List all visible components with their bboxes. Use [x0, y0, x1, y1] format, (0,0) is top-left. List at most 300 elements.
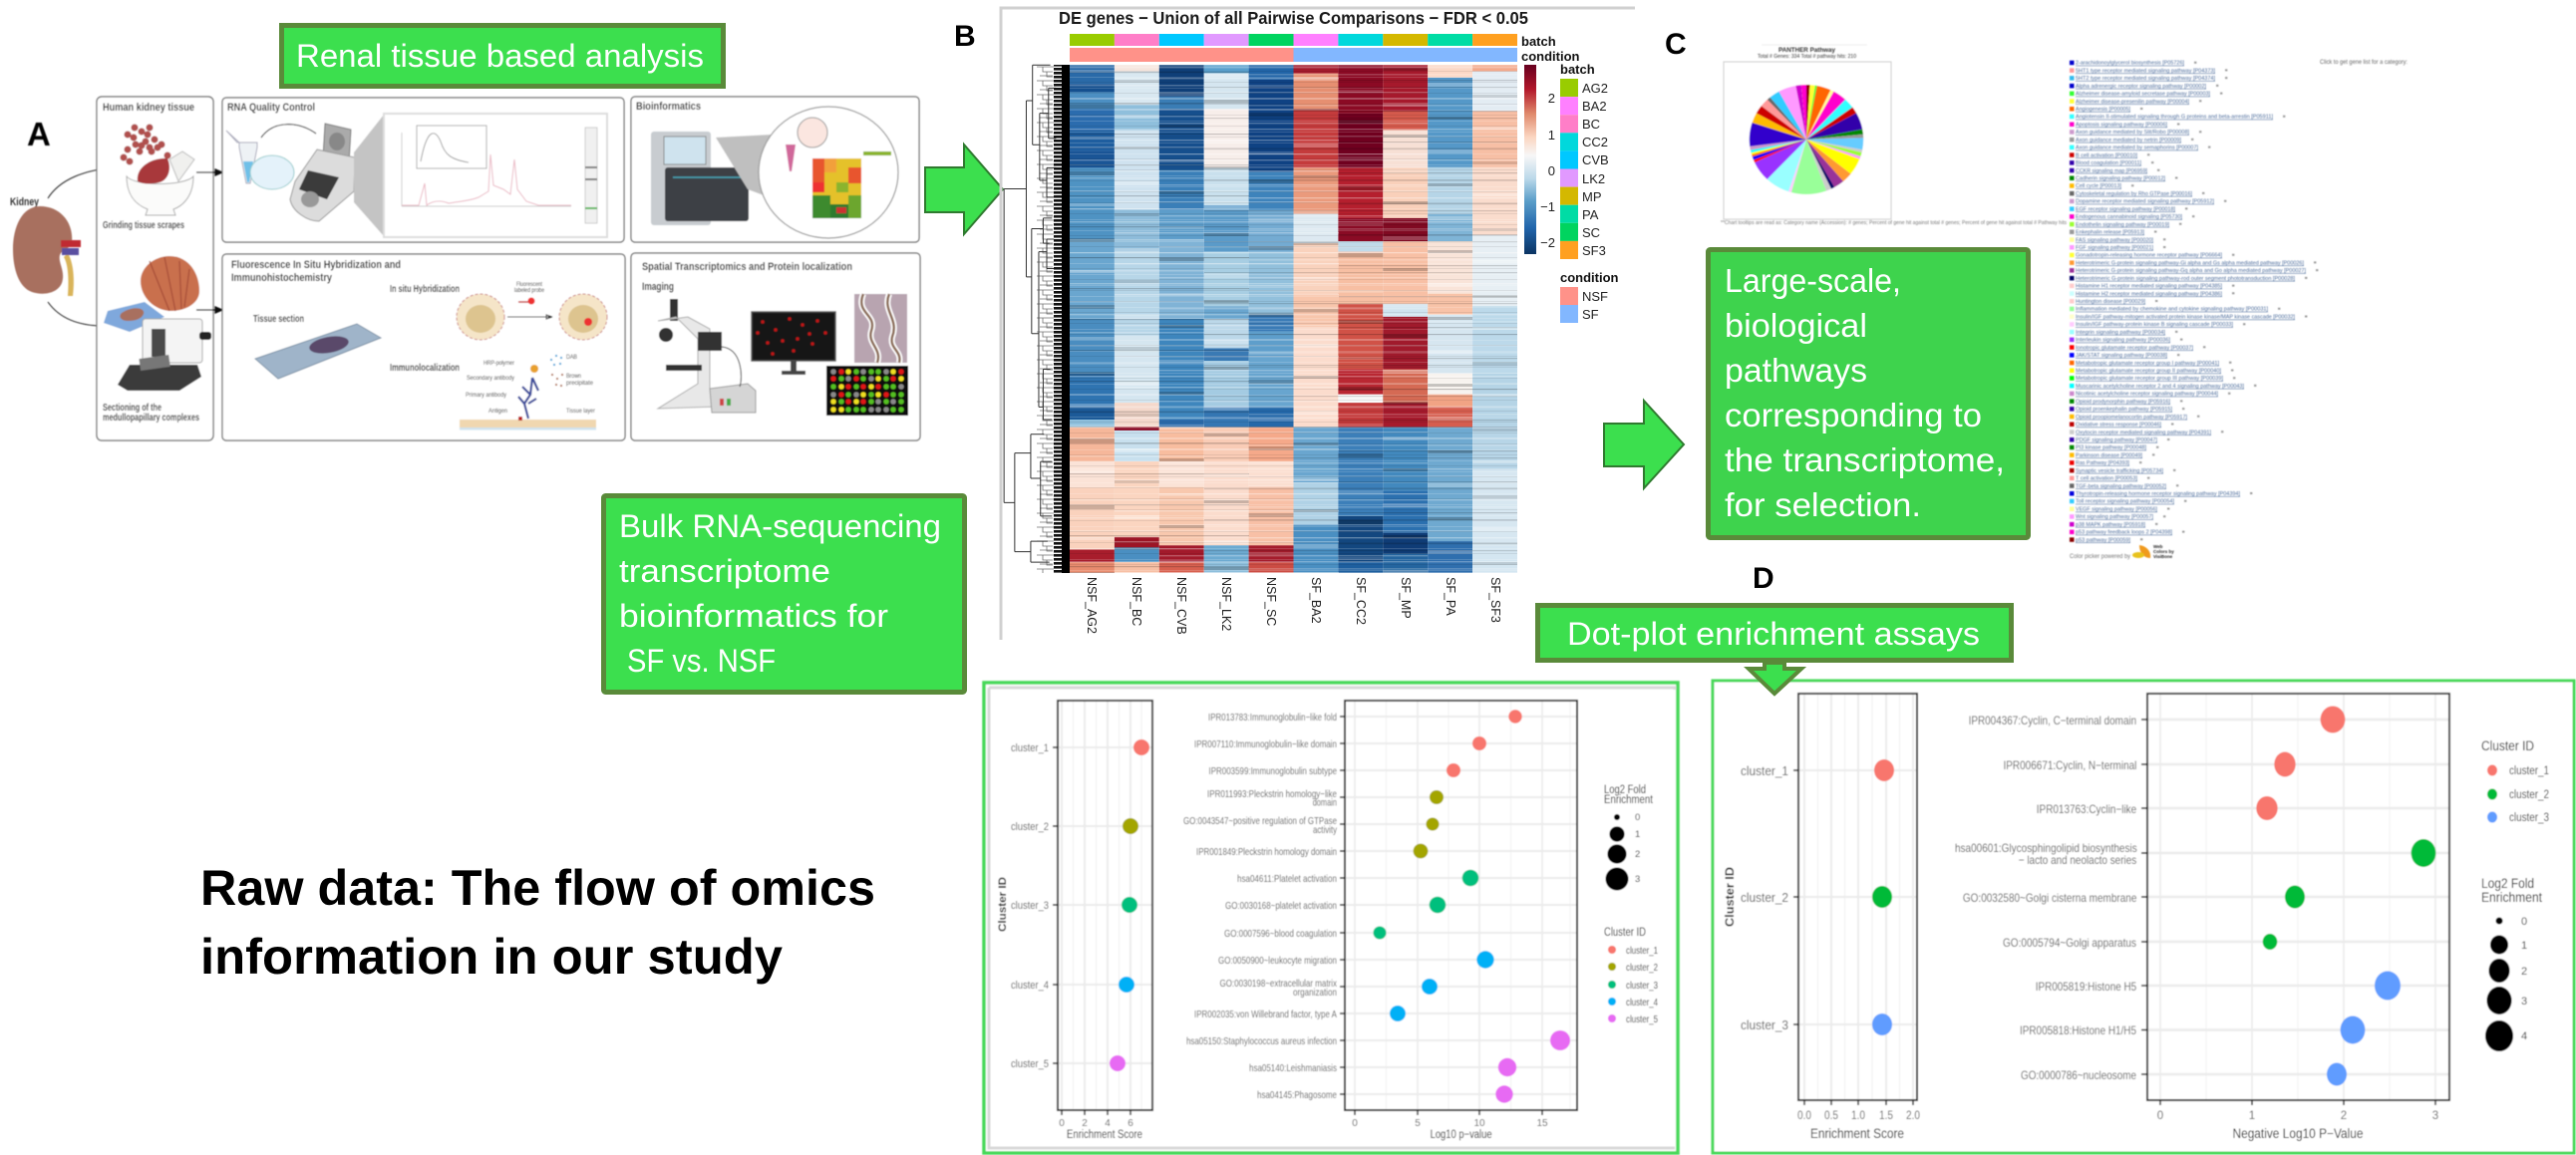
legend: fold enrichment: Log2 Fold — [2481, 876, 2534, 891]
pathway names — [2076, 61, 2306, 543]
colour scale: 2 — [1548, 91, 1555, 106]
legend: batch: MP — [1582, 189, 1601, 204]
ticks — [1053, 747, 1130, 1115]
term labels: IPR002035:von Willebrand factor, type A — [1194, 1009, 1337, 1020]
dots — [1133, 739, 1149, 755]
dots — [1874, 759, 1894, 781]
callout: large-scale pathways — [1709, 249, 2028, 538]
pathway names: Integrin signaling pathway [P00034] — [2076, 330, 2165, 336]
icon: magnifier — [250, 155, 294, 189]
icon: mortar and pestle — [127, 151, 194, 215]
legend: fold enrichment: 2 — [2521, 966, 2527, 978]
panel border — [1713, 681, 2574, 1153]
term labels: IPR006671:Cyclin, N−terminal — [2004, 758, 2136, 772]
callout: dot-plot enrichment assays — [1537, 606, 2012, 660]
legend: cluster ID: cluster_3 — [2509, 812, 2549, 824]
pathway names: PDGF signaling pathway [P00047] — [2076, 437, 2157, 443]
icon: tube — [226, 131, 257, 183]
legend: cluster ID: cluster_1 — [1626, 946, 1658, 957]
small circle — [798, 118, 827, 147]
icon: slide — [255, 324, 381, 379]
term labels: GO:0030168~platelet activation — [1225, 900, 1337, 912]
zoom wedge — [354, 115, 384, 236]
term labels: hsa05140:Leishmaniasis — [1249, 1062, 1337, 1074]
pathway names: p53 pathway [P00059] — [2076, 537, 2130, 543]
icon: kidney — [13, 206, 81, 296]
curved arrow — [261, 125, 316, 138]
term labels: hsa04611:Platelet activation — [1237, 873, 1337, 885]
legend: fold enrichment — [1604, 784, 1654, 891]
callout: large-scale pathways: corresponding to — [1725, 397, 1982, 433]
x title: Enrichment Score — [1067, 1129, 1142, 1141]
panel: human kidney tissue — [97, 97, 213, 440]
label A: A — [27, 116, 51, 152]
legend: batch: CC2 — [1582, 135, 1608, 149]
x title: Log10 p−value — [1431, 1129, 1492, 1141]
legend: condition: SF — [1582, 307, 1599, 322]
pathway names: Alpha adrenergic receptor signaling pathway [P00002] — [2076, 84, 2206, 90]
pathway names: Heterotrimeric G-protein signaling pathway-Gi alpha and Gs alpha mediated pathway [P00026] — [2076, 260, 2304, 266]
arrow: to heatmap — [925, 144, 1003, 234]
panel: bioinformatics — [631, 97, 919, 242]
y labels: cluster_1 — [1011, 742, 1049, 754]
legend: cluster ID: cluster_2 — [2509, 789, 2549, 801]
pathway names: Toll receptor signaling pathway [P00054] — [2076, 499, 2174, 505]
term labels: organization — [1293, 987, 1337, 999]
callout: dot-plot enrichment assays: Dot-plot enrichment assays — [1567, 616, 1980, 652]
icon: antibodies — [518, 378, 538, 419]
pathway names: EGF receptor signaling pathway [P00018] — [2076, 206, 2175, 212]
pathway names: TGF-beta signaling pathway [P00052] — [2076, 483, 2166, 489]
heading: RNA Quality Control — [227, 102, 315, 114]
logo text: Colors by — [2153, 549, 2174, 554]
sample labels: SF_SF3 — [1488, 577, 1502, 623]
pathway names: Oxidative stress response [P00046] — [2076, 423, 2161, 429]
term labels: GO:0030198~extracellular matrix — [1220, 978, 1338, 990]
term labels — [1183, 712, 1338, 1101]
pathway names: Metabotropic glutamate receptor group III pathway [P00039] — [2076, 376, 2223, 382]
logo text — [2153, 544, 2174, 559]
electropherogram panel — [384, 114, 607, 237]
x labels — [1059, 1118, 1133, 1129]
x labels: 2 — [1082, 1118, 1088, 1129]
icon: cell — [457, 294, 504, 340]
callout: large-scale pathways: for selection. — [1725, 486, 1921, 523]
term labels: GO:0000786~nucleosome — [2021, 1068, 2136, 1082]
pathway names: Metabotropic glutamate receptor group II pathway [P00040] — [2076, 369, 2221, 375]
term labels: − lacto and neolacto series — [2019, 853, 2136, 867]
pathway names: Nicotinic acetylcholine receptor signaling pathway [P00044] — [2076, 392, 2218, 398]
pathway names: Alzheimer disease-amyloid secretase pathway [P00003] — [2076, 92, 2210, 98]
x labels: 5 — [1415, 1118, 1421, 1129]
sample labels: SF_MP — [1399, 577, 1413, 619]
subheading: Imaging — [642, 281, 674, 293]
legend: condition: condition — [1560, 270, 1619, 285]
arrow: kidney to sectioning — [48, 302, 104, 326]
antibody labels — [466, 354, 596, 415]
slide layer — [460, 428, 596, 431]
pathway names: Angiogenesis [P00005] — [2076, 107, 2130, 113]
antibody labels: Primary antibody — [466, 392, 507, 399]
y labels: cluster_4 — [1011, 980, 1049, 992]
panel: spatial transcriptomics — [631, 253, 920, 440]
pathway names: B cell activation [P00010] — [2076, 152, 2137, 158]
logo text: VisiBone — [2153, 554, 2173, 559]
term labels: IPR013763:Cyclin−like — [2037, 802, 2136, 816]
callout: bulk RNA sequencing: Bulk RNA-sequencing — [619, 508, 941, 544]
dots — [1508, 710, 1522, 723]
pathway names: Endothelin signaling pathway [P00019] — [2076, 222, 2169, 228]
pathway names: Muscarinic acetylcholine receptor 2 and 4 signaling pathway [P00043] — [2076, 384, 2244, 390]
subheading: In situ Hybridization — [390, 284, 460, 295]
callout: renal tissue based analysis — [281, 26, 724, 86]
legend: fold enrichment: Enrichment — [2481, 890, 2542, 905]
x labels: 15 — [1536, 1118, 1548, 1129]
icon: cell with probe — [559, 294, 607, 340]
colour scale: 1 — [1548, 128, 1555, 143]
callout: large-scale pathways: Large-scale, — [1725, 262, 1901, 299]
icon: DAB dots — [551, 356, 561, 365]
dots — [2321, 706, 2345, 733]
legend: batch: AG2 — [1582, 81, 1608, 96]
pie chart block: Total # Genes: 334 Total # pathway hits: 210 — [1758, 54, 1856, 60]
x labels: 2 — [2341, 1110, 2347, 1122]
term labels: IPR013783:Immunoglobulin−like fold — [1208, 712, 1337, 723]
swatches — [2070, 61, 2074, 542]
arrow: section to FISH — [196, 307, 222, 313]
heading line 2: Immunohistochemistry — [231, 272, 333, 284]
pathway names: Synaptic vesicle trafficking [P05734] — [2076, 468, 2163, 474]
pathway names: Blood coagulation [P00011] — [2076, 160, 2141, 166]
subheading: Tissue section — [253, 314, 304, 325]
legend: fold enrichment: 0 — [1635, 812, 1640, 823]
click note: Click to get gene list for a category: — [2320, 60, 2408, 66]
pathway names: Axon guidance mediated by netrin [P00009] — [2076, 138, 2181, 144]
icon: cable — [722, 347, 741, 387]
term labels: GO:0043547~positive regulation of GTPase — [1183, 815, 1337, 827]
legend: batch: CVB — [1582, 152, 1609, 167]
caption: Grinding tissue scrapes — [103, 220, 184, 231]
pathway names: Alzheimer disease-presenilin pathway [P00004] — [2076, 99, 2189, 105]
pathway names: Angiotensin II-stimulated signaling through G proteins and beta-arrestin [P05911] — [2076, 115, 2273, 121]
antibody labels: Tissue layer — [566, 408, 596, 415]
panel: RNA quality control — [222, 98, 624, 242]
icon: microarray — [826, 366, 908, 416]
x title: Negative Log10 P−Value — [2233, 1126, 2363, 1141]
callout: bulk RNA sequencing: transcriptome — [619, 553, 830, 589]
arrow head — [98, 323, 106, 329]
legend: condition: NSF — [1582, 289, 1608, 304]
pathway names: Dopamine receptor mediated signaling pathway [P05912] — [2076, 199, 2214, 205]
icon: nucleus with signal — [568, 305, 598, 333]
pathway names: CCKR signaling map [P06959] — [2076, 168, 2147, 174]
pathway names: Cell cycle [P00013] — [2076, 183, 2121, 189]
caption: Sectioning of the — [103, 403, 161, 414]
y labels: cluster_5 — [1011, 1058, 1049, 1070]
term labels: GO:0050900~leukocyte migration — [1218, 955, 1337, 967]
panel A: renal tissue workflow — [10, 97, 920, 440]
pathway names: Metabotropic glutamate receptor group I pathway [P00041] — [2076, 361, 2219, 367]
icon: small tube — [786, 144, 796, 171]
subheading: Immunolocalization — [390, 363, 460, 374]
callout: renal tissue based analysis: Renal tissue based analysis — [296, 38, 704, 74]
panel: FISH and IHC — [222, 254, 625, 440]
panel D1: five-cluster dot plot — [984, 683, 1678, 1153]
legend: fold enrichment: 3 — [2521, 996, 2527, 1008]
term labels: hsa05150:Staphylococcus aureus infection — [1186, 1035, 1337, 1047]
arrow: kidney to tissue — [48, 167, 118, 198]
legend: fold enrichment: 4 — [2521, 1030, 2527, 1042]
pathway names: 2-arachidonoylglycerol biosynthesis [P05726] — [2076, 61, 2184, 67]
pathway names: Thyrotropin-releasing hormone receptor signaling pathway [P04394] — [2076, 491, 2240, 497]
pathway names: PI3 kinase pathway [P00048] — [2076, 445, 2146, 451]
ticks — [2141, 720, 2435, 1105]
label C: C — [1665, 28, 1687, 61]
x labels: 0 — [2157, 1110, 2163, 1122]
sample labels: NSF_CVB — [1174, 577, 1188, 635]
small heatmap — [812, 158, 861, 218]
pathway names: Oxytocin receptor mediated signaling pathway [P04391] — [2076, 430, 2211, 435]
pathway names: FGF signaling pathway [P00021] — [2076, 245, 2153, 251]
logo text: Web — [2153, 544, 2163, 549]
legend: cluster ID: Cluster ID — [2481, 738, 2534, 753]
legend: batch: SF3 — [1582, 243, 1606, 258]
colour scale — [1524, 65, 1555, 254]
y labels: cluster_1 — [1741, 764, 1788, 778]
legend: batch: LK2 — [1582, 171, 1605, 186]
term labels: domain — [1313, 797, 1337, 809]
x labels: 0.5 — [1824, 1110, 1838, 1122]
sample labels — [1085, 577, 1502, 635]
term labels: IPR003599:Immunoglobulin subtype — [1208, 765, 1337, 777]
dendrogram — [1004, 65, 1070, 573]
term labels: IPR004367:Cyclin, C−terminal domain — [1969, 714, 2136, 727]
legend: cluster ID — [2481, 738, 2549, 824]
probe label: Fluorescent — [516, 282, 542, 288]
x labels — [2157, 1110, 2438, 1122]
term labels: IPR005819:Histone H5 — [2036, 980, 2136, 994]
heading: raw data — [200, 860, 875, 985]
sample labels: NSF_BC — [1129, 577, 1143, 626]
legend: fold enrichment: Log2 Fold — [1604, 784, 1646, 796]
legend: cluster ID: Cluster ID — [1604, 927, 1646, 939]
legend: batch: SC — [1582, 225, 1600, 240]
heading: Bioinformatics — [636, 101, 701, 113]
legend: batch: batch — [1560, 62, 1595, 77]
term labels: IPR005818:Histone H1/H5 — [2020, 1023, 2136, 1037]
panel B: heatmap — [954, 8, 1635, 640]
y title: Cluster ID — [997, 877, 1009, 932]
pathway names: Endogenous cannabinoid signaling [P05730] — [2076, 214, 2182, 220]
heatmap title: DE genes − Union of all Pairwise Comparisons − FDR < 0.05 — [1059, 8, 1528, 28]
callout: bulk RNA sequencing: bioinformatics for — [619, 598, 888, 634]
icon: probe — [518, 297, 534, 305]
term labels: hsa00601:Glycosphingolipid biosynthesis — [1955, 841, 2137, 855]
colour legend — [863, 151, 891, 155]
sample labels: NSF_LK2 — [1219, 577, 1233, 631]
condition annotation bar — [1070, 48, 1517, 62]
pathway names: JAK/STAT signaling pathway [P00038] — [2076, 353, 2167, 359]
term labels — [1955, 714, 2137, 1082]
pathway names: Gonadotropin-releasing hormone receptor pathway [P06664] — [2076, 253, 2222, 259]
pathway names: Opioid proopiomelanocortin pathway [P05917] — [2076, 415, 2187, 421]
chart: log10 p-value — [1183, 701, 1577, 1141]
icon: visibone logo — [2132, 545, 2150, 558]
colour picker note: Color picker powered by — [2070, 554, 2130, 560]
icon: tissue image — [854, 294, 907, 363]
icon: tissue on slide — [308, 334, 350, 356]
pathway names: Opioid proenkephalin pathway [P05915] — [2076, 407, 2172, 413]
legend: cluster ID — [1604, 927, 1658, 1025]
icon: HRP — [530, 365, 538, 373]
pathway names: VEGF signaling pathway [P00056] — [2076, 506, 2157, 512]
antigen — [518, 417, 522, 421]
sample labels: NSF_SC — [1264, 577, 1278, 626]
x labels: 2.0 — [1906, 1110, 1920, 1122]
ticks — [1793, 770, 1913, 1105]
kidney label: Kidney — [10, 196, 40, 208]
pathway names: Interleukin signaling pathway [P00036] — [2076, 338, 2170, 344]
chart: enrichment score — [997, 701, 1152, 1141]
heading: Spatial Transcriptomics and Protein localization — [642, 261, 852, 273]
annotation label condition: condition — [1521, 49, 1580, 64]
callout: large-scale pathways: pathways — [1725, 352, 1867, 389]
x labels: 0 — [1352, 1118, 1358, 1129]
heading: Human kidney tissue — [103, 102, 194, 114]
term labels: hsa04145:Phagosome — [1257, 1089, 1337, 1101]
term labels: GO:0007596~blood coagulation — [1224, 928, 1337, 940]
term labels: GO:0032580~Golgi cisterna membrane — [1963, 891, 2137, 905]
pathway names: Axon guidance mediated by Slit/Robo [P00008] — [2076, 130, 2189, 136]
legend: cluster ID: cluster_1 — [2509, 765, 2549, 777]
antibody labels: DAB — [566, 354, 577, 361]
term labels: IPR001849:Pleckstrin homology domain — [1196, 846, 1337, 858]
pathway names: 5HT2 type receptor mediated signaling pathway [P04374] — [2076, 76, 2215, 82]
x labels: 4 — [1105, 1118, 1111, 1129]
legend: fold enrichment: 1 — [2521, 940, 2527, 952]
icon: tissue fragments — [124, 128, 167, 161]
antibody labels: Secondary antibody — [467, 375, 515, 382]
legend: fold enrichment: 1 — [1635, 829, 1640, 840]
sample labels: NSF_AG2 — [1085, 577, 1099, 634]
tissue layer — [460, 420, 596, 428]
x labels: 1 — [2249, 1110, 2255, 1122]
legend: batch: PA — [1582, 207, 1599, 222]
heading line 1: Fluorescence In Situ Hybridization and — [231, 259, 401, 271]
caption: medullopapillary complexes — [103, 413, 199, 424]
label D: D — [1753, 562, 1774, 595]
icon: sequencer — [651, 132, 749, 225]
antibody labels: HRP-polymer — [483, 360, 515, 367]
pie chart block: PANTHER Pathway — [1778, 47, 1835, 54]
pie — [1777, 112, 1835, 167]
ticks — [1340, 717, 1542, 1115]
pathway names: Histamine H1 receptor mediated signaling pathway [P04385] — [2076, 284, 2222, 290]
icon: precipitate dots — [552, 375, 562, 386]
pathway names: Histamine H2 receptor mediated signaling pathway [P04386] — [2076, 291, 2222, 297]
pathway names: Apoptosis signaling pathway [P00006] — [2076, 122, 2167, 128]
label B: B — [954, 20, 976, 53]
x title: Enrichment Score — [1810, 1126, 1904, 1141]
arrow: tissue to RNA QC — [196, 169, 222, 175]
arrow: to pathway panel — [1604, 401, 1684, 488]
legend: cluster ID: cluster_4 — [1626, 998, 1658, 1009]
legend: batch: BC — [1582, 117, 1600, 132]
legend: fold enrichment: 0 — [2521, 916, 2527, 928]
heading: raw data: Raw data: The flow of omics — [200, 860, 875, 916]
colour scale: −1 — [1540, 199, 1555, 214]
legend: cluster ID: cluster_2 — [1626, 963, 1658, 974]
batch annotation bar — [1070, 34, 1517, 46]
y labels: cluster_2 — [1741, 891, 1788, 905]
icon: controller — [710, 384, 756, 413]
pathway names: Ras Pathway [P04393] — [2076, 460, 2129, 466]
pathway names: Enkephalin release [P05913] — [2076, 229, 2144, 235]
heatmap body — [1070, 65, 1517, 573]
callout: bulk RNA sequencing — [604, 496, 965, 692]
x labels: 6 — [1127, 1118, 1133, 1129]
arrow head — [110, 164, 118, 170]
icon: spectrophotometer — [290, 124, 355, 221]
x labels — [1797, 1110, 1920, 1122]
callout: large-scale pathways: the transcriptome, — [1725, 441, 2005, 478]
legend: cluster ID: cluster_3 — [1626, 981, 1658, 992]
legend: fold enrichment: Enrichment — [1604, 794, 1654, 806]
annotation label batch: batch — [1521, 34, 1556, 49]
icon: microtome — [104, 256, 211, 391]
pathway names: p53 pathway feedback loops 2 [P04398] — [2076, 530, 2172, 536]
probe label: labeled probe — [514, 288, 545, 294]
antibody labels: Antigen — [488, 408, 507, 415]
legend: fold enrichment: 3 — [1635, 874, 1640, 885]
arrow — [507, 315, 552, 319]
legend: cluster ID: cluster_5 — [1626, 1014, 1658, 1025]
callout: large-scale pathways: biological — [1725, 307, 1867, 344]
term labels: IPR007110:Immunoglobulin−like domain — [1194, 738, 1337, 750]
legend: fold enrichment — [2481, 876, 2542, 1051]
y labels: cluster_3 — [1011, 900, 1049, 912]
pathway names: Axon guidance mediated by semaphorins [P00007] — [2076, 145, 2198, 151]
frame lines — [1001, 8, 1635, 640]
arrow: callout to dot plots — [1749, 663, 1801, 694]
pathway names: Heterotrimeric G-protein signaling pathway-Gq alpha and Go alpha mediated pathway [P00027] — [2076, 268, 2306, 274]
x labels: 0 — [1059, 1118, 1065, 1129]
pathway names: Insulin/IGF pathway-protein kinase B signaling cascade [P00033] — [2076, 322, 2233, 328]
y labels: cluster_2 — [1011, 821, 1049, 833]
sample labels: SF_PA — [1444, 577, 1457, 616]
pathway names: 5HT1 type receptor mediated signaling pathway [P04373] — [2076, 68, 2215, 74]
antibody labels: precipitate — [566, 380, 593, 387]
icon: tube liquid — [243, 161, 253, 182]
colour scale: 0 — [1548, 163, 1555, 178]
pathway names: FAS signaling pathway [P00020] — [2076, 237, 2153, 243]
pathway names: Huntington disease [P00029] — [2076, 299, 2145, 305]
y labels: cluster_3 — [1741, 1018, 1788, 1032]
zoom circle — [759, 107, 898, 238]
term labels: GO:0005794~Golgi apparatus — [2003, 936, 2136, 950]
pathway names: T cell activation [P00053] — [2076, 476, 2137, 482]
panel C: PANTHER pathway — [1665, 28, 2408, 560]
inner image edge — [989, 688, 1675, 1148]
icon: nucleus — [466, 305, 495, 333]
legend: batch — [1560, 62, 1609, 259]
y labels — [1741, 764, 1788, 1032]
x labels: 1.0 — [1851, 1110, 1865, 1122]
legend: condition — [1560, 270, 1619, 323]
icon: monitor — [752, 312, 835, 375]
pathway names: Wnt signaling pathway [P00057] — [2076, 514, 2153, 520]
y title: Cluster ID — [1723, 867, 1737, 927]
